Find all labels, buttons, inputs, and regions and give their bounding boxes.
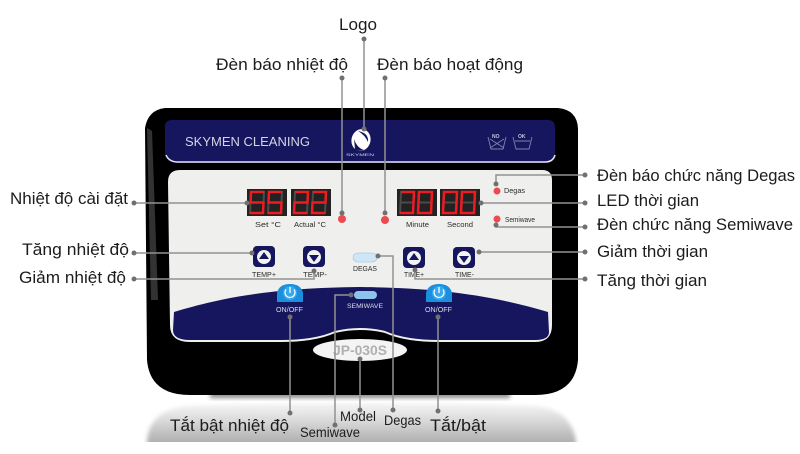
model oval bbox=[313, 339, 407, 361]
device body bbox=[145, 108, 578, 398]
label: LED thời gian: LED thời gian bbox=[597, 191, 699, 210]
lamp labels bbox=[504, 188, 535, 224]
logo: SKYMEN bbox=[346, 152, 374, 157]
label: Logo: Logo bbox=[339, 15, 377, 34]
button: semiwave bbox=[347, 291, 384, 310]
button: temp up bbox=[252, 246, 276, 279]
label: Model: Model bbox=[340, 408, 376, 424]
button: semiwave: SEMIWAVE bbox=[347, 303, 384, 310]
buttons bbox=[252, 246, 475, 314]
wash icons: OK bbox=[518, 134, 526, 140]
white control panel bbox=[168, 170, 552, 342]
blue lower band bbox=[173, 287, 549, 340]
button: temp down bbox=[303, 246, 328, 279]
label: Đèn chức năng Semiwave: Đèn chức năng Semiwave bbox=[597, 215, 793, 234]
label: Đèn báo chức năng Degas: Đèn báo chức năng Degas bbox=[597, 166, 795, 185]
button: degas: DEGAS bbox=[353, 266, 377, 273]
label: Tăng nhiệt độ: Tăng nhiệt độ bbox=[22, 240, 129, 259]
LED time displays: Second bbox=[447, 222, 473, 229]
labels: Set °C bbox=[255, 221, 281, 229]
button: time up: TIME+ bbox=[404, 272, 424, 279]
label: Đèn báo hoạt động: Đèn báo hoạt động bbox=[377, 55, 523, 74]
wash icons bbox=[488, 134, 532, 149]
button: temp down: TEMP- bbox=[303, 272, 328, 279]
label: Giảm thời gian: Giảm thời gian bbox=[597, 242, 708, 261]
device reflection bbox=[144, 404, 578, 442]
lamp labels: Semiwave bbox=[505, 217, 535, 224]
button: time down bbox=[453, 247, 475, 279]
header band bbox=[165, 120, 555, 163]
label: Tăng thời gian: Tăng thời gian bbox=[597, 271, 707, 290]
label: Nhiệt độ cài đặt: Nhiệt độ cài đặt bbox=[10, 189, 128, 208]
model oval: JP-030S bbox=[333, 342, 387, 358]
logo bbox=[346, 127, 374, 157]
button: degas bbox=[353, 253, 377, 273]
label: Đèn báo nhiệt độ: Đèn báo nhiệt độ bbox=[216, 55, 348, 74]
wash icons: NO bbox=[492, 134, 500, 140]
callout lines bbox=[132, 36, 588, 428]
LED temperature displays bbox=[247, 189, 331, 229]
label: Semiwave: Semiwave bbox=[300, 424, 360, 440]
label: Tắt/bật: Tắt/bật bbox=[430, 416, 486, 435]
button: right on/off: ON/OFF bbox=[425, 307, 452, 314]
button: left on/off bbox=[276, 284, 303, 314]
brand name: SKYMEN CLEANING bbox=[185, 134, 310, 149]
button: temp up: TEMP+ bbox=[252, 272, 276, 279]
LED time displays: Minute bbox=[406, 222, 429, 229]
lamp labels: Degas bbox=[504, 188, 526, 195]
LED temperature displays: Actual °C bbox=[294, 221, 326, 229]
button: time up bbox=[403, 247, 425, 279]
button: time down: TIME- bbox=[455, 272, 475, 279]
label: Tắt bật nhiệt độ: Tắt bật nhiệt độ bbox=[170, 416, 289, 435]
indicator lamps bbox=[338, 188, 500, 224]
button: left on/off: ON/OFF bbox=[276, 307, 303, 314]
label: Degas: Degas bbox=[384, 412, 421, 428]
label: Giảm nhiệt độ: Giảm nhiệt độ bbox=[19, 268, 126, 287]
LED time displays bbox=[397, 189, 480, 229]
button: right on/off bbox=[425, 284, 452, 314]
